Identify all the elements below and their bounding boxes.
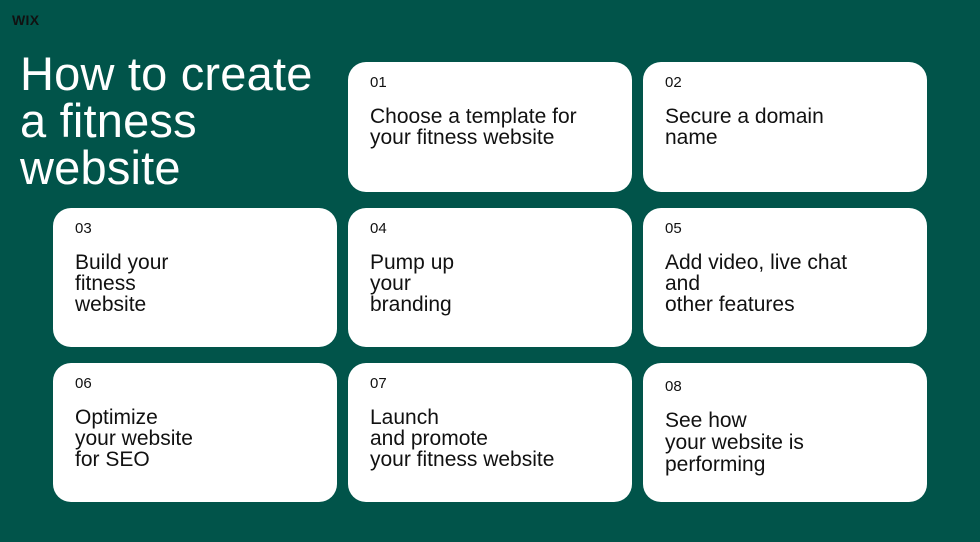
card 06: 06	[75, 375, 92, 392]
card 07	[348, 363, 632, 502]
card 03: website	[75, 293, 146, 316]
card 03: Build your	[75, 251, 168, 274]
card 03: fitness	[75, 272, 136, 295]
card 01: Choose a template for	[370, 105, 577, 128]
card 06: Optimize	[75, 406, 158, 429]
card 02	[643, 62, 927, 192]
card 02: 02	[665, 74, 682, 91]
card 02: name	[665, 126, 718, 149]
card 01: 01	[370, 74, 387, 91]
card 06: for SEO	[75, 448, 150, 471]
card 01: your fitness website	[370, 126, 554, 149]
card 06: your website	[75, 427, 193, 450]
card 05	[643, 208, 927, 347]
card 04: Pump up	[370, 251, 454, 274]
card 04: branding	[370, 293, 452, 316]
card 08: your website is	[665, 431, 804, 454]
title	[20, 47, 313, 194]
card 05: Add video, live chat	[665, 251, 847, 274]
card 02: Secure a domain	[665, 105, 824, 128]
card 07: 07	[370, 375, 387, 392]
title: a fitness	[20, 94, 197, 147]
card 05: and	[665, 272, 700, 295]
title: website	[20, 141, 181, 194]
logo: WIX	[12, 12, 39, 28]
card 07: and promote	[370, 427, 488, 450]
card 08: 08	[665, 378, 682, 395]
card 08: performing	[665, 453, 765, 476]
card 03	[53, 208, 337, 347]
card 05: 05	[665, 220, 682, 237]
card 04: your	[370, 272, 411, 295]
card 05: other features	[665, 293, 795, 316]
title: How to create	[20, 47, 313, 100]
card 03: 03	[75, 220, 92, 237]
card 04	[348, 208, 632, 347]
card 01	[348, 62, 632, 192]
card 07: your fitness website	[370, 448, 554, 471]
card 07: Launch	[370, 406, 439, 429]
card 08: See how	[665, 409, 747, 432]
card 08	[643, 363, 927, 502]
card 04: 04	[370, 220, 387, 237]
card 06	[53, 363, 337, 502]
